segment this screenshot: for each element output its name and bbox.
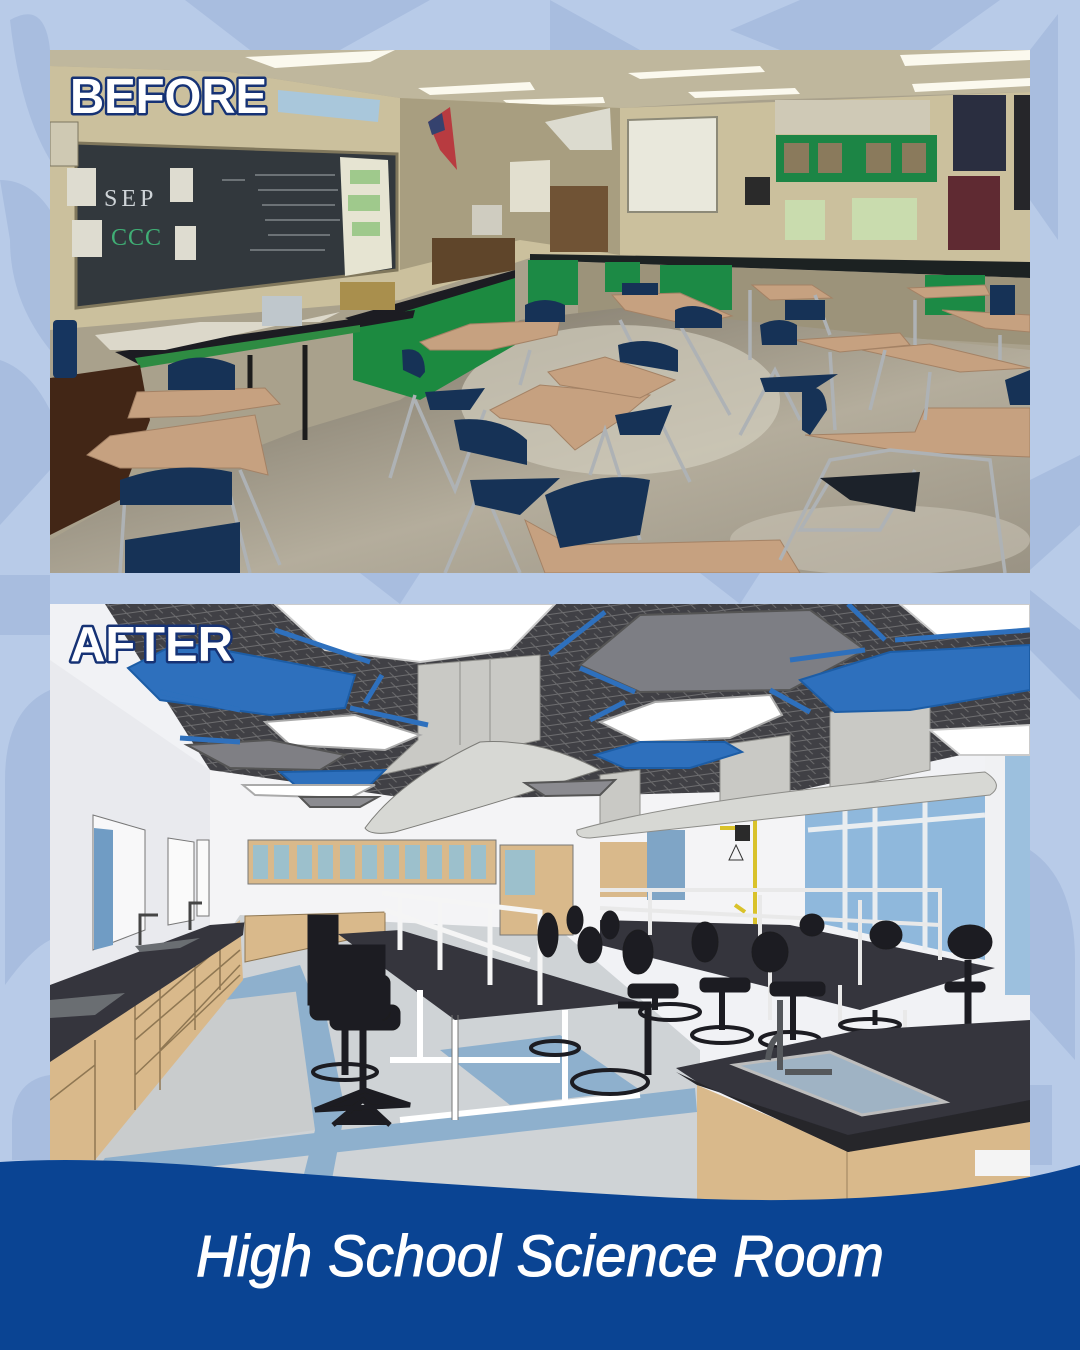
green wall cabinet [776,135,937,182]
ceiling [50,50,1030,108]
back right benches [600,920,995,1010]
top left banner [278,90,380,122]
blue baffles [160,604,1030,742]
walls [50,66,1030,330]
blue footer wave [0,1160,1080,1350]
right windows [805,795,985,960]
ceiling lights [245,50,1030,106]
wall cabinets [248,830,685,935]
green island [353,272,515,400]
left cabinet [50,365,150,535]
ceiling structure [105,604,1030,800]
panel: after rendering [50,604,1030,1204]
floor [50,308,1030,573]
panel: before photo: SEP [104,186,157,212]
floor blue stripes [90,965,697,1190]
emergency shower [720,820,755,930]
ceiling hexagon panels [128,604,1030,807]
foreground island [676,1000,1030,1204]
chair frames [120,290,1005,573]
desk chairs [87,285,1030,573]
sticky chart [340,157,392,276]
panel: before photo: CCC [111,225,162,251]
side table [115,310,415,365]
back counters [530,254,1030,278]
wall sticky notes [785,198,917,240]
left wall [50,660,210,985]
posters right [953,95,1006,171]
black stools [308,906,992,1125]
center benches [338,930,640,1020]
whiteboard [628,117,717,212]
ducts [380,655,930,825]
panel: before photo [50,50,1030,575]
floor [190,915,700,1199]
left windows [93,815,209,950]
blackboard posters [67,168,196,260]
before label: BEFORE [70,70,267,124]
left counter [50,920,243,1160]
back wall items [510,160,550,212]
blackboard [76,143,397,308]
title: High School Science Room [196,1224,884,1289]
after label: AFTER [70,618,233,672]
navy seats [120,283,1030,573]
flag [428,107,457,170]
